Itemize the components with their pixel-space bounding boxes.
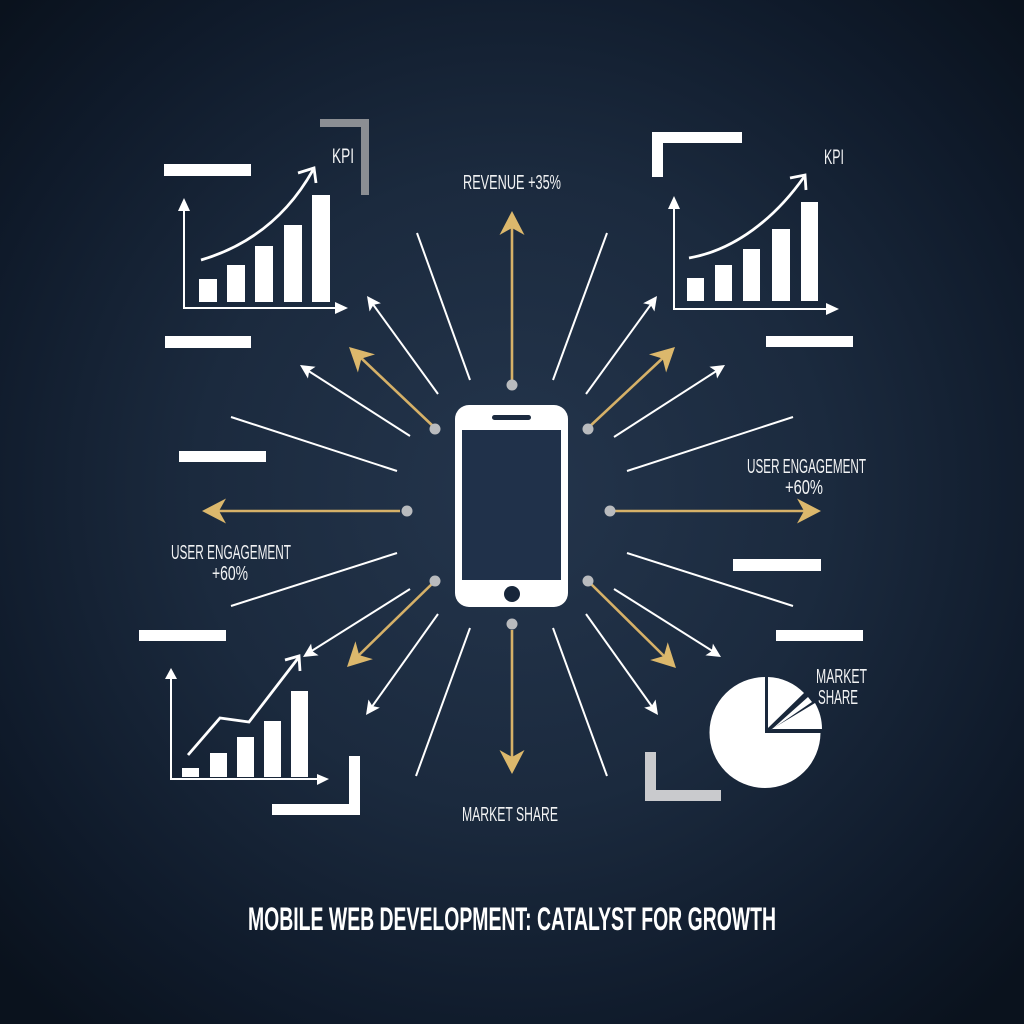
white arrows (296, 292, 729, 719)
chart: bottom-left growth (165, 656, 329, 785)
label: user engagement left: +60% (212, 563, 248, 585)
radiating plain lines (231, 233, 793, 776)
label: user engagement left: USER ENGAGEMENT (171, 542, 291, 564)
chart: top-left growth (178, 168, 348, 314)
label: user engagement left (171, 542, 291, 585)
label: market share pie: SHARE (818, 687, 858, 709)
label: KPI right: KPI (824, 146, 844, 169)
label: market share pie: MARKET (816, 666, 867, 688)
arrow origin dots (402, 380, 616, 630)
label: KPI left: KPI (332, 145, 354, 168)
chart: top-right growth (668, 175, 839, 315)
icon: smartphone (455, 405, 568, 607)
placeholder label bars (139, 164, 863, 641)
brackets (272, 119, 742, 815)
label: user engagement right (747, 456, 866, 499)
label: revenue: REVENUE +35% (463, 172, 561, 194)
chart: market share pie (710, 677, 822, 788)
label: user engagement right: +60% (785, 477, 823, 499)
label: user engagement right: USER ENGAGEMENT (747, 456, 866, 478)
gold arrows (202, 211, 821, 774)
label: market share pie (816, 666, 867, 709)
label: market share bottom: MARKET SHARE (462, 804, 558, 826)
